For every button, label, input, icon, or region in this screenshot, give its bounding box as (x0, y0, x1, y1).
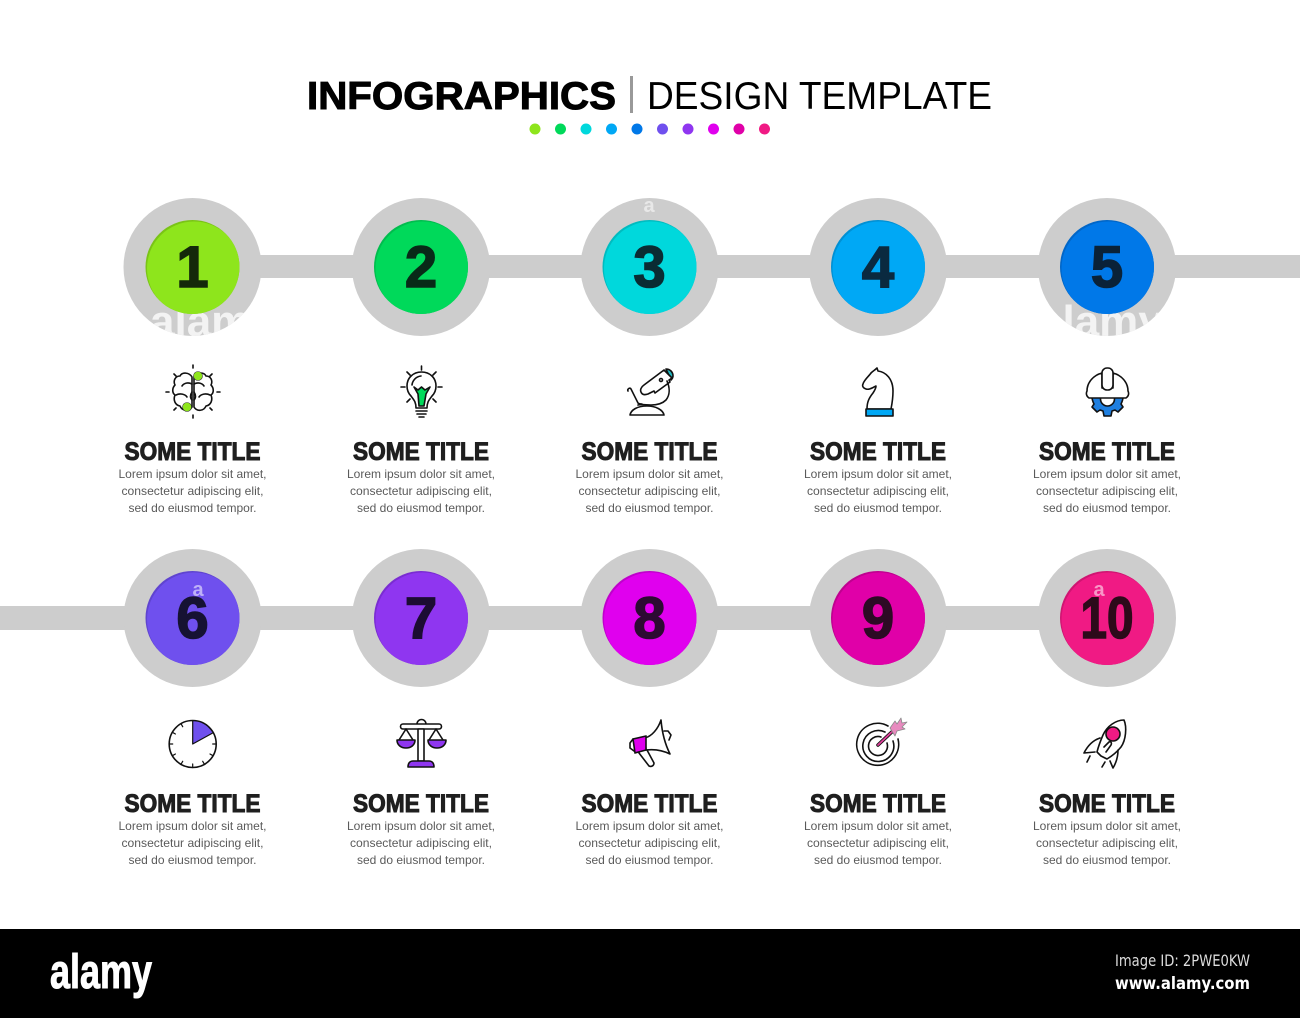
text block: Lorem ipsum dolor sit amet, (804, 467, 952, 481)
number badge 5 (1038, 198, 1176, 346)
panel: step 4 (804, 198, 952, 515)
number badge 10 (1038, 549, 1176, 687)
text block: Lorem ipsum dolor sit amet, (804, 819, 952, 833)
number badge 9: 9 (862, 586, 894, 651)
text block (576, 467, 724, 515)
text block: Lorem ipsum dolor sit amet, (1033, 467, 1181, 481)
number badge 2: 2 (405, 235, 437, 300)
text block (804, 467, 952, 515)
heading: SOME TITLE (353, 438, 489, 466)
text block (118, 819, 266, 867)
text block: consectetur adipiscing elit, (807, 836, 949, 850)
text block: sed do eiusmod tempor. (128, 501, 256, 515)
number badge 4: 4 (862, 235, 894, 300)
panel: step 5 (1033, 198, 1181, 515)
text block: consectetur adipiscing elit, (807, 484, 949, 498)
panel: step 2 (347, 198, 495, 515)
text block (118, 467, 266, 515)
panel: step 6 (118, 549, 266, 867)
text block: Lorem ipsum dolor sit amet, (347, 819, 495, 833)
text block: consectetur adipiscing elit, (350, 836, 492, 850)
heading: SOME TITLE (353, 790, 489, 818)
text block: Lorem ipsum dolor sit amet, (118, 819, 266, 833)
number badge 3 (580, 195, 718, 336)
number badge 10: a (1093, 579, 1105, 601)
text block: sed do eiusmod tempor. (586, 501, 714, 515)
number badge 7 (352, 549, 490, 687)
heading: SOME TITLE (124, 790, 260, 818)
icon: balance scale (397, 720, 446, 767)
text block: consectetur adipiscing elit, (122, 484, 264, 498)
number badge 10: 10 (1080, 586, 1134, 651)
heading: SOME TITLE (1039, 790, 1175, 818)
number badge 1: alamy (150, 297, 275, 346)
number badge 5: alamy (1038, 297, 1163, 346)
number badge 6 (124, 549, 262, 687)
heading: SOME TITLE (810, 438, 946, 466)
text block: Lorem ipsum dolor sit amet, (576, 819, 724, 833)
text block (576, 819, 724, 867)
text block: Lorem ipsum dolor sit amet, (1033, 819, 1181, 833)
heading: SOME TITLE (810, 790, 946, 818)
footer logo: alamy (50, 946, 152, 999)
text block (1033, 467, 1181, 515)
icon: light bulb (401, 366, 442, 417)
text block: consectetur adipiscing elit, (578, 484, 720, 498)
title: INFOGRAPHICS (307, 75, 616, 118)
text block: sed do eiusmod tempor. (586, 853, 714, 867)
title: DESIGN TEMPLATE (647, 75, 992, 118)
icon: helmet and gear (1086, 368, 1129, 416)
number badge 8: 8 (633, 586, 666, 651)
heading: SOME TITLE (582, 438, 718, 466)
text block (804, 819, 952, 867)
text block: consectetur adipiscing elit, (1036, 836, 1178, 850)
icon: rocket (1084, 720, 1126, 768)
number badge 8 (580, 549, 718, 687)
text block: Lorem ipsum dolor sit amet, (118, 467, 266, 481)
icon: brain (166, 365, 220, 418)
icon: microscope (628, 369, 673, 415)
panel: step 8 (576, 549, 724, 867)
panel: step 7 (347, 549, 495, 867)
website: www.alamy.com (1115, 974, 1250, 994)
panel: step 10 (1033, 549, 1181, 867)
heading: SOME TITLE (1039, 438, 1175, 466)
title (307, 75, 992, 118)
icon: timer clock (169, 720, 216, 768)
number badge 5: 5 (1091, 235, 1123, 300)
text block: sed do eiusmod tempor. (814, 853, 942, 867)
text block: sed do eiusmod tempor. (1043, 501, 1171, 515)
text block: consectetur adipiscing elit, (578, 836, 720, 850)
footer bar (0, 929, 1300, 1018)
heading: SOME TITLE (124, 438, 260, 466)
icon: chess knight (863, 368, 893, 416)
image id: Image ID: 2PWE0KW (1115, 951, 1250, 970)
text block: consectetur adipiscing elit, (1036, 484, 1178, 498)
connector bar: top row (192, 255, 1300, 278)
number badge 6: a (192, 579, 204, 601)
text block: Lorem ipsum dolor sit amet, (347, 467, 495, 481)
panel: step 3 (576, 195, 724, 515)
colour dots row (530, 124, 770, 134)
text block: consectetur adipiscing elit, (350, 484, 492, 498)
text block: sed do eiusmod tempor. (357, 501, 485, 515)
heading: SOME TITLE (582, 790, 718, 818)
number badge 7: 7 (405, 586, 437, 651)
text block (1033, 819, 1181, 867)
text block: sed do eiusmod tempor. (1043, 853, 1171, 867)
number badge 3: 3 (633, 235, 666, 300)
number badge 1: 1 (176, 235, 209, 300)
number badge 9 (809, 549, 947, 687)
panel: step 1 (118, 198, 275, 515)
text block: Lorem ipsum dolor sit amet, (576, 467, 724, 481)
number badge 3: a (643, 195, 655, 217)
text block: sed do eiusmod tempor. (814, 501, 942, 515)
text block: sed do eiusmod tempor. (128, 853, 256, 867)
text block: consectetur adipiscing elit, (122, 836, 264, 850)
number badge 2 (352, 198, 490, 336)
icon: megaphone (630, 720, 671, 766)
text block: sed do eiusmod tempor. (357, 853, 485, 867)
text block (347, 467, 495, 515)
number badge 1 (124, 198, 260, 336)
text block (347, 819, 495, 867)
panel: step 9 (804, 549, 952, 867)
number badge 4 (809, 198, 947, 336)
connector bar: bottom row (0, 606, 1107, 630)
number badge 6: 6 (176, 586, 209, 651)
icon: target and arrow (857, 718, 907, 765)
